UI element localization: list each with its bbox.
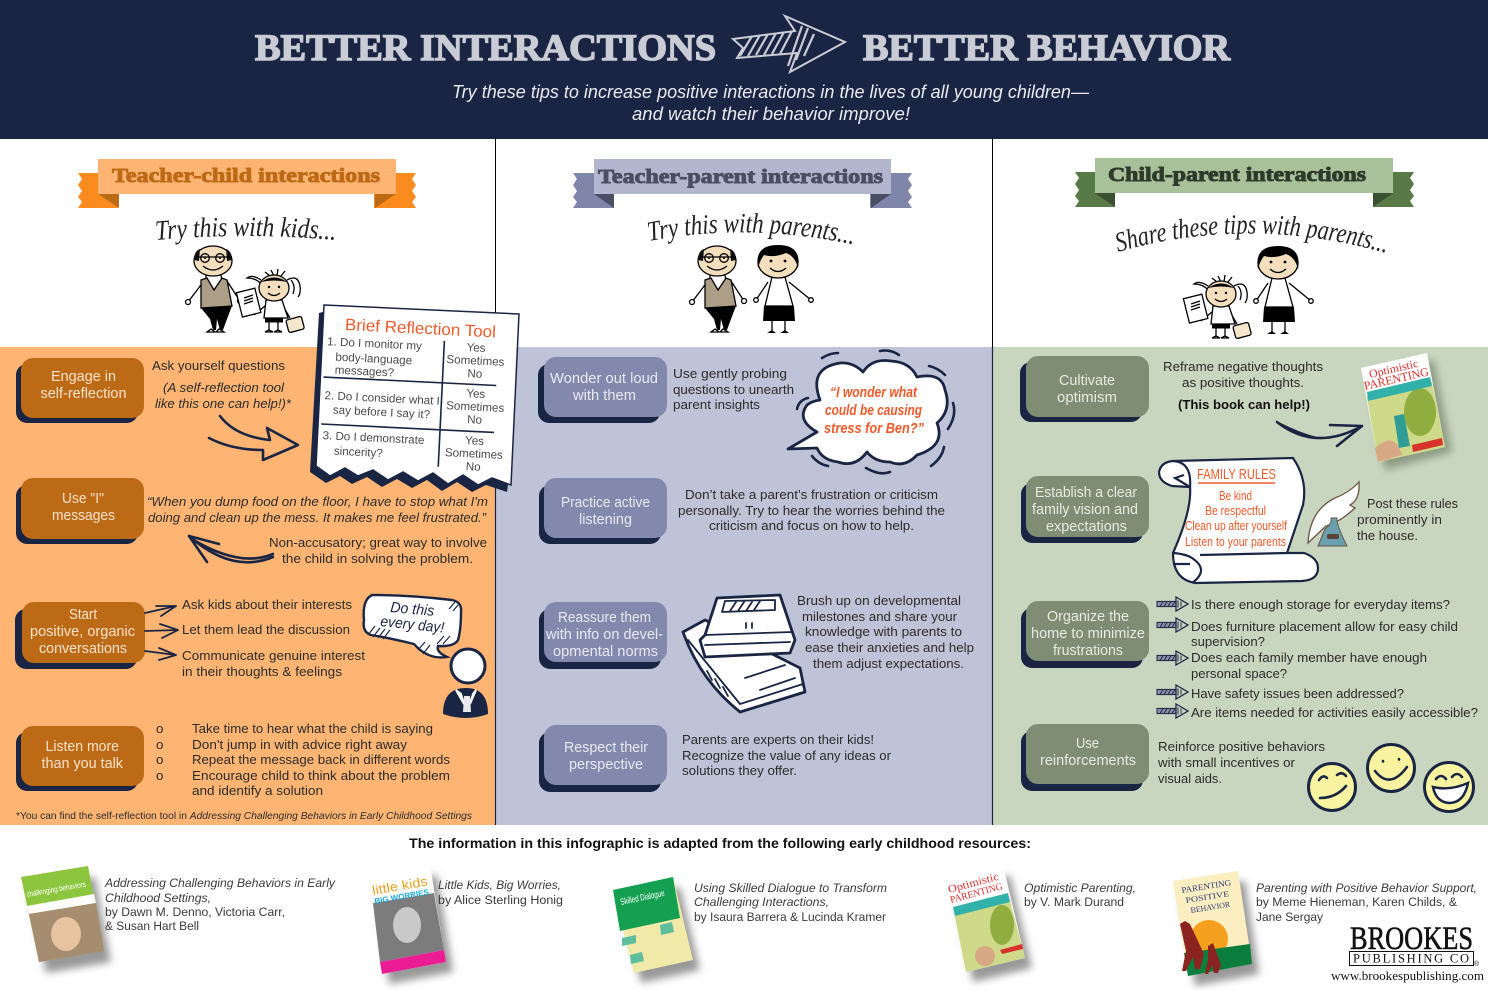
- button: wonder out loud: with them: [572, 388, 636, 404]
- list: listening tips: [156, 721, 450, 798]
- panel: brief reflection tool: Sometimes: [445, 446, 503, 462]
- subtitle: Try these tips to increase positive interactions in the lives of all young children—: [452, 82, 1090, 102]
- ribbon: child-parent interactions: Child-parent interactions: [1108, 164, 1366, 186]
- callout: do this every day: [364, 595, 461, 657]
- text: parenting with positive behavior support: [1256, 881, 1477, 924]
- panel: brief reflection tool: 3. Do I demonstrate: [322, 429, 425, 447]
- panel: brief reflection tool: messages?: [335, 364, 395, 380]
- button: establish family vision: expectations: [1046, 519, 1127, 535]
- text: optimistic parenting source: [1024, 881, 1136, 909]
- text: reinforce behaviors: [1157, 739, 1325, 786]
- text: post these rules: the house.: [1357, 528, 1418, 543]
- panel: brief reflection tool: No: [466, 460, 481, 474]
- book: parenting with positive behavior support: POSITIVE: [1185, 889, 1230, 905]
- title: better interactions: BETTER INTERACTIONS: [255, 28, 716, 69]
- button: reassure them: Reassure them: [558, 610, 651, 626]
- button: respect their perspective: [539, 725, 667, 792]
- text: ask yourself questions: (A self-reflection tool: [163, 380, 285, 395]
- panel: brief reflection tool: say before I say it?: [333, 404, 431, 421]
- text: developmental milestones: Brush up on developmental: [797, 593, 961, 608]
- button: establish family vision: family vision and: [1032, 502, 1138, 518]
- panel: brief reflection tool: Yes: [466, 387, 486, 401]
- text: reinforce behaviors: Reinforce positive behaviors: [1158, 739, 1325, 754]
- text: active listening: [678, 487, 945, 533]
- button: start conversations: Start: [69, 607, 97, 623]
- text: reframe thoughts: [1163, 359, 1323, 412]
- footnote: *You can find the self-reflection tool in Addressing Challenging Behaviors in Early Childhood Settings: [16, 810, 473, 822]
- button: start conversations: positive, organic: [30, 624, 135, 640]
- icon: three smiley faces: [1308, 744, 1474, 812]
- text: developmental milestones: [797, 593, 974, 671]
- text: ask yourself questions: [152, 358, 292, 411]
- text: probing questions: [673, 366, 794, 412]
- illustration: family rules scroll: Be kind: [1219, 489, 1252, 503]
- text: active listening: personally. Try to hear the worries behind the: [678, 503, 945, 518]
- text: parents are experts: Parents are experts on their kids!: [682, 732, 874, 747]
- panel: brief reflection tool: [310, 305, 519, 492]
- text: skilled dialogue: [694, 881, 887, 924]
- script: try this with kids: Try this with kids...: [156, 216, 334, 244]
- text: I message example: “When you dump food on the floor, I have to stop what I'm: [147, 494, 488, 509]
- subtitle: [452, 82, 1090, 124]
- button: reassure them: opmental norms: [553, 644, 658, 660]
- text: parenting with positive behavior support: Parenting with Positive Behavior Support,: [1256, 881, 1477, 895]
- text: skilled dialogue: by Isaura Barrera & Lucinda Kramer: [694, 910, 886, 924]
- logo: brookes publishing: [1331, 921, 1484, 983]
- button: organize the home: frustrations: [1053, 643, 1123, 659]
- ribbon: teacher-parent interactions: [573, 159, 912, 208]
- text: I message example: the child in solving the problem.: [282, 551, 473, 566]
- button: cultivate optimism: [1020, 356, 1149, 422]
- book: parenting with positive behavior support: [1173, 871, 1259, 986]
- callout: thought cloud: could be causing: [825, 403, 922, 419]
- text: post these rules: [1357, 496, 1458, 543]
- button: use reinforcements: Use: [1076, 736, 1099, 752]
- text: developmental milestones: them adjust expectations.: [813, 656, 964, 671]
- text: active listening: criticism and focus on how to help.: [709, 518, 914, 533]
- text: probing questions: questions to unearth: [673, 382, 794, 397]
- list: listening tips: o: [156, 737, 163, 752]
- illustration: child and parent: [1183, 246, 1313, 339]
- text: reinforce behaviors: with small incentives or: [1157, 755, 1296, 770]
- book: addressing challenging behaviors: [21, 866, 111, 973]
- list: listening tips: o: [156, 768, 163, 783]
- book: optimistic parenting: PARENTING: [1363, 364, 1430, 393]
- list: listening tips: Repeat the message back in different words: [192, 752, 450, 767]
- panel: brief reflection tool: 2. Do I consider what I: [324, 389, 440, 408]
- button: use I messages: Use "I": [62, 491, 104, 507]
- button: listen more: than you talk: [42, 756, 124, 772]
- book: optimistic parenting: Optimistic: [1368, 358, 1419, 381]
- text: reframe thoughts: Reframe negative thoughts: [1163, 359, 1323, 374]
- book: skilled dialogue: Skilled Dialogue: [619, 888, 665, 907]
- panel: brief reflection tool: 1. Do I monitor my: [327, 335, 422, 353]
- button: respect their perspective: Respect their: [564, 740, 648, 756]
- panel: brief reflection tool: No: [467, 367, 483, 381]
- icon: person: [443, 649, 488, 718]
- panel: child-parent background: [993, 347, 1488, 825]
- header band: [0, 0, 1488, 139]
- text: addressing challenging behaviors: [104, 876, 336, 933]
- illustration: stack of books: [683, 595, 805, 712]
- panel: brief reflection tool: Sometimes: [446, 353, 505, 369]
- button: use I messages: [16, 478, 144, 544]
- text: parents are experts: [682, 732, 892, 778]
- illustration: family rules scroll: [1159, 458, 1318, 583]
- callout: do this every day: every day!: [380, 613, 446, 637]
- callout: thought cloud: [788, 350, 954, 473]
- button: reassure them: [539, 602, 667, 669]
- text: little kids big worries: by Alice Sterling Honig: [438, 893, 563, 907]
- text: addressing challenging behaviors: Childhood Settings,: [105, 891, 211, 905]
- button: listen more: Listen more: [46, 739, 119, 755]
- list: home organization questions: personal space?: [1191, 666, 1287, 681]
- book: optimistic parenting source: [947, 865, 1032, 982]
- script: share these tips with parents: Share these tips with parents...: [1116, 215, 1385, 252]
- book: optimistic parenting source: PARENTING: [949, 881, 1004, 906]
- ribbon: teacher-parent interactions: Teacher-parent interactions: [598, 166, 883, 188]
- script: try this with parents: Try this with parents...: [648, 213, 852, 244]
- book: skilled dialogue: [613, 877, 700, 983]
- arrow: to optimistic parenting book: [1277, 422, 1362, 446]
- button: practice active listening: Practice active: [561, 495, 650, 511]
- list: home organization questions: Have safety issues been addressed?: [1191, 686, 1404, 701]
- logo: brookes publishing: ®: [1474, 960, 1480, 968]
- book: little kids big worries: BIG WORRIES: [374, 887, 430, 906]
- book: optimistic parenting source: Optimistic: [947, 871, 1000, 896]
- button: engage in self-reflection: [16, 358, 144, 423]
- button: wonder out loud: [538, 357, 667, 423]
- button: engage in self-reflection: self-reflection: [40, 386, 126, 402]
- book: parenting with positive behavior support: PARENTING: [1181, 877, 1232, 895]
- panel: brief reflection tool: Yes: [466, 341, 486, 355]
- text: optimistic parenting source: Optimistic Parenting,: [1024, 881, 1136, 895]
- book: parenting with positive behavior support: BEHAVIOR: [1190, 900, 1231, 915]
- button: use reinforcements: reinforcements: [1040, 753, 1136, 769]
- text: probing questions: parent insights: [673, 397, 760, 412]
- logo: brookes publishing: PUBLISHING CO: [1353, 952, 1469, 966]
- text: parenting with positive behavior support: Jane Sergay: [1256, 910, 1324, 924]
- button: establish family vision: Establish a clear: [1035, 485, 1137, 501]
- text: I message example: doing and clean up the mess. It makes me feel frustrated.”: [148, 510, 487, 525]
- arrow: to reflection tool: [209, 416, 298, 460]
- book: optimistic parenting: [1361, 353, 1452, 470]
- button: wonder out loud: Wonder out loud: [550, 371, 658, 387]
- button: practice active listening: listening: [579, 512, 632, 528]
- illustration: teacher and child: [186, 246, 305, 333]
- button: listen more: [16, 726, 144, 791]
- button: use I messages: messages: [52, 508, 115, 524]
- text: skilled dialogue: Using Skilled Dialogue to Transform: [694, 881, 887, 895]
- text: developmental milestones: ease their anxieties and help: [805, 640, 974, 655]
- text: conversation tips: Communicate genuine interest: [182, 648, 365, 663]
- text: reinforce behaviors: visual aids.: [1158, 771, 1222, 786]
- text: parents are experts: Recognize the value of any ideas or: [682, 748, 892, 763]
- list: home organization questions: Does furniture placement allow for easy child: [1191, 619, 1458, 634]
- button: cultivate optimism: Cultivate: [1059, 373, 1115, 389]
- heading: sources: The information in this infographic is adapted from the following early childhood resources:: [409, 835, 1031, 851]
- text: optimistic parenting source: by V. Mark Durand: [1024, 895, 1124, 909]
- button: organize the home: [1021, 601, 1149, 668]
- list: listening tips: and identify a solution: [192, 783, 323, 798]
- text: conversation tips: Ask kids about their interests: [182, 597, 352, 612]
- title: better behavior: BETTER BEHAVIOR: [863, 28, 1231, 69]
- text: addressing challenging behaviors: Addressing Challenging Behaviors in Early: [104, 876, 336, 890]
- text: skilled dialogue: Challenging Interactions,: [694, 895, 829, 909]
- button: start conversations: conversations: [39, 641, 127, 657]
- list: home organization questions: [1157, 597, 1478, 720]
- book: addressing challenging behaviors: challenging behaviors: [26, 880, 86, 899]
- subtitle: and watch their behavior improve!: [632, 104, 910, 124]
- text: ask yourself questions: Ask yourself questions: [152, 358, 285, 373]
- ribbon: teacher-child interactions: Teacher-child interactions: [112, 165, 380, 187]
- ribbon: child-parent interactions: [1075, 158, 1414, 207]
- panel: teacher-child background: [0, 347, 495, 825]
- list: home organization questions: Are items needed for activities easily accessible?: [1191, 705, 1478, 720]
- list: listening tips: Don't jump in with advice right away: [192, 737, 407, 752]
- list: home organization questions: Is there enough storage for everyday items?: [1191, 597, 1450, 612]
- button: organize the home: home to minimize: [1031, 626, 1145, 642]
- callout: do this every day: Do this: [390, 599, 435, 620]
- list: listening tips: Encourage child to think about the problem: [192, 768, 450, 783]
- button: engage in self-reflection: Engage in: [51, 369, 116, 385]
- text: parenting with positive behavior support: by Meme Hieneman, Karen Childs, &: [1256, 895, 1457, 909]
- button: cultivate optimism: optimism: [1057, 390, 1117, 406]
- illustration: family rules scroll: Listen to your parents: [1185, 535, 1286, 549]
- arrow: back to quote: [189, 536, 273, 562]
- illustration: family rules scroll: Clean up after yourself: [1185, 519, 1287, 533]
- panel: brief reflection tool: No: [467, 413, 482, 427]
- text: ask yourself questions: like this one can help!)*: [155, 396, 292, 411]
- illustration: teacher and parent: [690, 245, 813, 333]
- text: conversation tips: in their thoughts & feelings: [182, 664, 342, 679]
- list: listening tips: Take time to hear what the child is saying: [192, 721, 433, 736]
- text: addressing challenging behaviors: by Dawn M. Denno, Victoria Carr,: [105, 905, 285, 919]
- button: respect their perspective: perspective: [569, 757, 643, 773]
- button: start conversations: [15, 602, 145, 669]
- list: listening tips: o: [156, 752, 163, 767]
- text: little kids big worries: Little Kids, Big Worries,: [438, 878, 561, 892]
- text: parents are experts: solutions they offer.: [682, 763, 797, 778]
- panel: brief reflection tool: body-language: [335, 351, 412, 367]
- arrows: three conversation tips: [145, 606, 178, 660]
- column dividers: [496, 139, 992, 347]
- text: developmental milestones: knowledge with parents to: [805, 624, 962, 639]
- icon: hatched title arrow: [733, 16, 845, 72]
- text: addressing challenging behaviors: & Susan Hart Bell: [105, 919, 199, 933]
- panel: brief reflection tool: sincerity?: [334, 445, 384, 460]
- list: home organization questions: Does each family member have enough: [1191, 650, 1427, 665]
- panel: brief reflection tool: Yes: [465, 434, 484, 448]
- callout: thought cloud: stress for Ben?”: [824, 421, 925, 437]
- panel: teacher-parent background: [496, 347, 992, 825]
- button: organize the home: Organize the: [1047, 609, 1129, 625]
- text: active listening: Don’t take a parent’s frustration or criticism: [685, 487, 938, 502]
- panel: brief reflection tool: Sometimes: [446, 399, 505, 415]
- ribbon: teacher-child interactions: [78, 159, 416, 208]
- book: little kids big worries: little kids: [371, 873, 429, 898]
- illustration: family rules scroll: FAMILY RULES: [1197, 466, 1276, 483]
- icon: quill and ink: [1308, 482, 1359, 546]
- illustration: family rules scroll: Be respectful: [1205, 504, 1266, 518]
- logo: brookes publishing: www.brookespublishing.com: [1331, 968, 1484, 983]
- book: little kids big worries: [369, 865, 453, 984]
- text: I message example: Non-accusatory; great way to involve: [269, 535, 487, 550]
- button: use reinforcements: [1021, 724, 1149, 791]
- text: post these rules: prominently in: [1357, 512, 1442, 527]
- text: conversation tips: [182, 597, 365, 679]
- list: listening tips: o: [156, 721, 163, 736]
- text: developmental milestones: milestones and share your: [802, 609, 958, 624]
- button: establish family vision: [1021, 476, 1149, 543]
- list: home organization questions: supervision?: [1191, 634, 1265, 649]
- panel: brief reflection tool: Brief Reflection Tool: [345, 316, 496, 341]
- text: reframe thoughts: (This book can help!): [1178, 397, 1310, 412]
- callout: thought cloud: “I wonder what: [830, 385, 918, 401]
- text: I message example: [147, 494, 488, 566]
- button: practice active listening: [539, 478, 667, 544]
- text: probing questions: Use gently probing: [673, 366, 787, 381]
- text: reframe thoughts: as positive thoughts.: [1182, 375, 1304, 390]
- text: post these rules: Post these rules: [1367, 496, 1458, 511]
- text: conversation tips: Let them lead the discussion: [182, 622, 350, 637]
- text: little kids big worries: [438, 878, 563, 907]
- button: reassure them: with info on devel-: [545, 627, 663, 643]
